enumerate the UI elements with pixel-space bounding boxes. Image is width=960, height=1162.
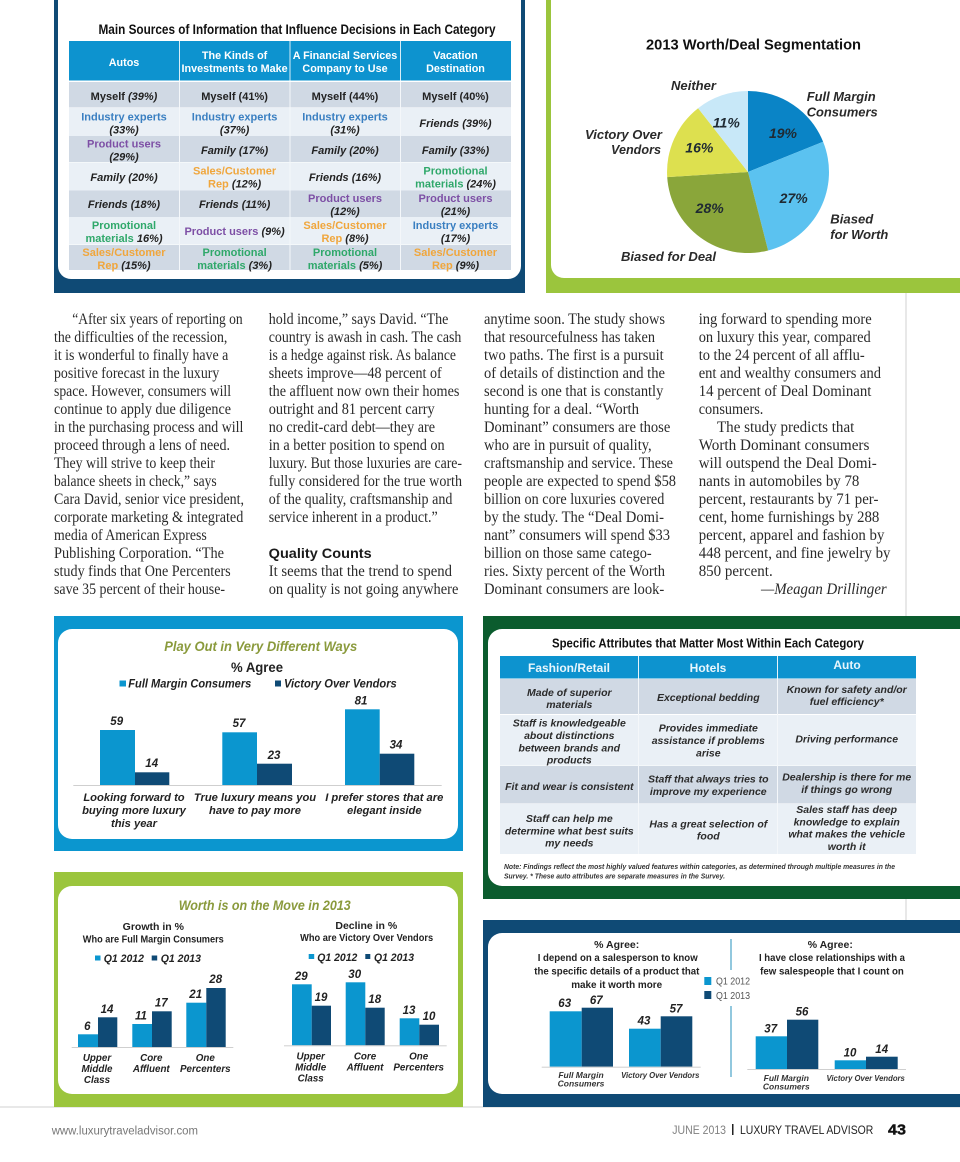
article text column 1: continue to apply due diligence <box>54 401 231 418</box>
article text column 3: nant” consumers will spend $33 <box>484 527 670 544</box>
chart: depend on a salesperson: 57 <box>670 1004 683 1016</box>
legend <box>120 678 397 690</box>
article text column 3: ries. Sixty percent of the Worth <box>484 563 665 580</box>
article text column 4: nants in automobiles by 78 <box>699 473 860 490</box>
article text column 4 <box>699 311 891 598</box>
table body rows: (17%) <box>441 233 471 245</box>
table body rows: Product users (9%) <box>184 226 285 238</box>
table rows <box>500 679 916 854</box>
chart: close relationships with salespeople: % Agree: <box>808 939 853 951</box>
footer: date, magazine name and page number: 43 <box>888 1122 906 1138</box>
table rows: materials <box>546 699 593 711</box>
table body rows: Product users <box>87 138 161 150</box>
article text column 3: craftsmanship and service. These <box>484 455 673 472</box>
article text column 2: outright and 81 percent carry <box>269 401 435 418</box>
article text column 2: country is awash in cash. The cash <box>269 329 462 346</box>
table body rows: Industry experts <box>192 112 277 124</box>
table body rows: Promotional <box>203 247 267 259</box>
chart: depend on a salesperson: Victory Over Vendors <box>621 1070 700 1080</box>
table body rows: (31%) <box>330 124 360 136</box>
table body rows: Family (17%) <box>201 145 269 157</box>
chart: depend on a salesperson: make it worth more <box>571 979 662 991</box>
table rows: knowledge to explain <box>794 816 900 828</box>
legend: Full Margin Consumers <box>128 678 251 690</box>
chart: decline in victory over vendors: Who are Victory Over Vendors <box>300 932 433 944</box>
table body rows: Rep (15%) <box>97 260 151 272</box>
table header: Auto <box>833 658 861 672</box>
chart: growth in full margin consumers <box>72 921 233 1086</box>
article text column 2: no credit-card debt—they are <box>269 419 435 436</box>
chart: growth in full margin consumers: 17 <box>155 998 168 1010</box>
table body rows: Family (33%) <box>422 145 489 157</box>
chart: decline in victory over vendors: Core <box>354 1052 377 1063</box>
table body rows <box>69 82 511 272</box>
article text column 4: cent, home furnishings by 288 <box>699 509 880 526</box>
chart: depend on a salesperson: Full Margin <box>558 1070 604 1080</box>
table body rows: Industry experts <box>413 220 498 232</box>
table rows: Has a great selection of <box>649 818 769 830</box>
table rows: Staff is knowledgeable <box>513 718 626 730</box>
article text column 1: the difficulties of the recession, <box>54 329 227 346</box>
table body rows: Industry experts <box>302 112 388 124</box>
pie labels: Full Margin <box>807 89 876 104</box>
chart: decline in victory over vendors: Decline in % <box>335 920 398 932</box>
heading: segmentation: 2013 Worth/Deal Segmentation <box>646 38 861 54</box>
table body rows: Myself (39%) <box>91 91 158 103</box>
article text column 1 <box>54 311 244 598</box>
pie labels: Victory Over <box>585 127 663 142</box>
table header <box>500 656 916 678</box>
table rows: about distinctions <box>524 730 615 742</box>
legend: Q1 2012 <box>716 976 750 988</box>
table footnote: Survey. * These auto attributes are separate measures in the Survey. <box>504 872 725 880</box>
pie labels: Consumers <box>807 104 878 120</box>
pie chart: 11% <box>713 114 740 130</box>
table header row: Destination <box>426 63 485 75</box>
article text column 2: sheets improve—48 percent of <box>269 365 442 382</box>
article text column 3: hunting for a deal. “Worth <box>484 401 639 418</box>
panel: worth is on the move bar charts <box>54 872 463 1107</box>
divider between charts <box>730 939 732 1077</box>
chart: decline in victory over vendors: Percenters <box>393 1063 445 1074</box>
table footnote <box>504 862 895 880</box>
chart: decline in victory over vendors: 19 <box>315 992 328 1004</box>
table rows: Exceptional bedding <box>657 692 760 704</box>
chart: decline in victory over vendors: Middle <box>295 1063 327 1074</box>
table body rows: Rep (8%) <box>321 233 369 245</box>
article text column 3: by the study. The “Deal Domi- <box>484 509 664 526</box>
article text column 3: who are in pursuit of quality, <box>484 437 652 454</box>
article text column 4: 14 percent of Deal Dominant <box>699 383 872 400</box>
table rows: Driving performance <box>795 734 898 746</box>
table rows: Staff that always tries to <box>648 774 769 786</box>
table body rows: Family (20%) <box>90 172 158 184</box>
article text column 3: Dominant consumers are look- <box>484 581 664 598</box>
article text column 1: “After six years of reporting on <box>72 311 243 328</box>
table body rows: Myself (40%) <box>422 91 489 103</box>
chart: depend on a salesperson: 43 <box>637 1016 651 1028</box>
category labels: buying more luxury <box>82 805 187 817</box>
article text column 1: in the purchasing process and will <box>54 419 243 436</box>
chart: growth in full margin consumers: 21 <box>188 989 202 1001</box>
table header row: The Kinds of <box>202 50 268 62</box>
table body rows: Industry experts <box>81 112 167 124</box>
table body rows: (12%) <box>330 206 360 218</box>
panel: main sources of information table <box>54 0 525 293</box>
article text column 4: Worth Dominant consumers <box>699 437 869 454</box>
table body rows: Friends (18%) <box>88 199 160 211</box>
byline: —Meagan Drillinger <box>760 581 888 598</box>
chart: close relationships with salespeople: Full Margin <box>764 1073 809 1083</box>
legend <box>704 976 750 1002</box>
article text column 1: it is wonderful to finally have a <box>54 347 228 364</box>
chart: decline in victory over vendors: 30 <box>348 969 362 981</box>
chart: growth in full margin consumers: Who are Full Margin Consumers <box>83 934 224 946</box>
article text column 3: billion on core luxuries covered <box>484 491 665 508</box>
chart: decline in victory over vendors: 18 <box>368 994 382 1006</box>
chart: depend on a salesperson: Consumers <box>558 1078 605 1088</box>
chart: close relationships with salespeople: 14 <box>875 1044 889 1056</box>
table rows: what makes the vehicle <box>788 829 905 841</box>
panel: 2013 worth/deal segmentation pie <box>546 0 960 293</box>
article text column 2: on quality is not going anywhere <box>269 581 459 598</box>
chart: decline in victory over vendors <box>284 920 447 1085</box>
table header row: Autos <box>109 57 139 69</box>
chart: decline in victory over vendors: Affluent <box>346 1063 384 1074</box>
article text column 3: that resourcefulness has taken <box>484 329 655 346</box>
table rows: Fit and wear is consistent <box>505 781 634 793</box>
article text column 2: luxury. But those luxuries are care- <box>269 455 462 472</box>
pie labels: Vendors <box>611 142 661 157</box>
article text column 3: of details of distinction and the <box>484 365 665 382</box>
table body rows: Sales/Customer <box>82 247 166 259</box>
chart: growth in full margin consumers: Percenters <box>180 1064 231 1075</box>
chart: depend on a salesperson: % Agree: <box>594 939 639 951</box>
chart: decline in victory over vendors: Class <box>298 1074 324 1085</box>
chart: growth in full margin consumers: 11 <box>135 1010 147 1022</box>
pie chart <box>667 91 829 253</box>
chart: depend on a salesperson <box>534 939 701 1088</box>
article text column 1: media of American Express <box>54 527 207 544</box>
category labels: True luxury means you <box>194 792 316 804</box>
table rows: assistance if problems <box>652 735 765 747</box>
category labels: this year <box>111 818 158 830</box>
table body rows: Friends (11%) <box>199 199 271 211</box>
bars: 14 <box>145 758 159 770</box>
table body rows: (37%) <box>220 124 250 136</box>
table body rows: Friends (39%) <box>419 118 492 130</box>
article text column 4: on luxury this year, compared <box>699 329 871 346</box>
chart: growth in full margin consumers: 28 <box>208 974 223 986</box>
article text column 3: Dominant” consumers are those <box>484 419 670 436</box>
panel: specific attributes table <box>483 616 960 899</box>
table header: Hotels <box>690 661 727 675</box>
chart: close relationships with salespeople: 10 <box>844 1048 857 1060</box>
table rows: my needs <box>545 838 594 850</box>
panel: play out in very different ways bar chart <box>54 616 463 851</box>
table header row: A Financial Services <box>293 50 397 62</box>
article text column 4: percent, apparel and fashion by <box>699 527 885 544</box>
chart: depend on a salesperson: the specific details of a product that <box>534 966 700 978</box>
table body rows: (21%) <box>441 206 471 218</box>
chart: growth in full margin consumers: 14 <box>101 1004 114 1016</box>
chart: decline in victory over vendors: Upper <box>297 1052 326 1063</box>
table body rows: Myself (44%) <box>312 91 379 103</box>
pie labels: Biased for Deal <box>621 249 716 264</box>
legend: Q1 2013 <box>716 991 750 1002</box>
article text column 1: save 35 percent of their house- <box>54 581 225 598</box>
chart: decline in victory over vendors: Q1 2013 <box>374 952 414 964</box>
table rows: fuel efficiency* <box>810 696 885 708</box>
chart: close relationships with salespeople: Victory Over Vendors <box>827 1073 905 1083</box>
subheading: % agree: % Agree <box>231 659 283 675</box>
article text column 2 <box>269 311 462 598</box>
article text column 1: space. However, consumers will <box>54 383 231 400</box>
chart: close relationships with salespeople: I have close relationships with a <box>759 952 905 964</box>
table body rows: Rep (12%) <box>208 178 262 190</box>
chart: decline in victory over vendors: Q1 2012 <box>317 952 357 964</box>
chart: growth in full margin consumers: Growth in % <box>123 921 185 933</box>
table body rows: Sales/Customer <box>414 247 498 259</box>
pie chart: 19% <box>769 125 798 141</box>
table body rows: Promotional <box>92 220 156 232</box>
bars: 23 <box>267 750 281 762</box>
heading: main sources: Main Sources of Information that Influence Decisions in Each Category <box>98 22 496 37</box>
chart: growth in full margin consumers: One <box>196 1053 215 1064</box>
article text column 3: two paths. The first is a pursuit <box>484 347 664 364</box>
pie labels: Biased <box>830 212 874 226</box>
chart: close relationships with salespeople: few salespeople that I count on <box>760 966 904 978</box>
category labels: I prefer stores that are <box>325 792 443 804</box>
table rows: worth it <box>828 841 866 853</box>
article text column 2: the affluent now own their homes <box>269 383 459 400</box>
chart: growth in full margin consumers: Middle <box>81 1064 113 1075</box>
table body rows: (29%) <box>109 152 139 164</box>
article text column 4: will outspend the Deal Domi- <box>699 455 877 472</box>
table rows: products <box>546 755 592 767</box>
pie chart: 28% <box>695 200 724 216</box>
table rows: Provides immediate <box>659 723 758 735</box>
table body rows: Myself (41%) <box>201 91 268 103</box>
article text column 1: positive forecast in the luxury <box>54 365 220 382</box>
article text column 4: ing forward to spending more <box>699 311 872 328</box>
bars: 34 <box>390 740 403 752</box>
table header row <box>69 41 511 80</box>
table rows: improve my experience <box>650 786 767 798</box>
bars <box>73 696 442 786</box>
pie labels <box>585 78 888 264</box>
article text column 4: ent and wealthy consumers and <box>699 365 881 382</box>
table body rows: Promotional <box>313 247 377 259</box>
article text column 4: The study predicts that <box>717 419 855 436</box>
article text column 4: consumers. <box>699 401 763 418</box>
table rows: Made of superior <box>527 687 613 699</box>
pie labels: Neither <box>671 78 717 93</box>
footer: date, magazine name and page number: JUNE 2013 <box>672 1125 726 1137</box>
article text column 2: is a hedge against risk. As balance <box>269 347 456 364</box>
chart: decline in victory over vendors: 13 <box>403 1005 416 1017</box>
article text column 4: to the 24 percent of all afflu- <box>699 347 865 364</box>
bars: 59 <box>110 716 124 728</box>
table body rows: Rep (9%) <box>432 260 479 272</box>
pie chart: 16% <box>685 140 714 156</box>
chart: depend on a salesperson: I depend on a salesperson to know <box>538 952 698 964</box>
panel: salesperson agreement bar charts <box>483 920 960 1107</box>
chart: growth in full margin consumers: Core <box>140 1053 163 1064</box>
table rows: arise <box>696 747 721 759</box>
heading: specific attributes: Specific Attributes that Matter Most Within Each Category <box>552 636 864 650</box>
table body rows: Family (20%) <box>311 145 379 157</box>
category labels: elegant inside <box>347 805 422 817</box>
article text column 2: of the quality, craftsmanship and <box>269 491 453 508</box>
chart: decline in victory over vendors: One <box>409 1052 429 1063</box>
table body rows: materials (3%) <box>197 260 272 272</box>
article text column 3: second is one that is constantly <box>484 383 664 400</box>
chart: depend on a salesperson: 67 <box>590 995 603 1007</box>
table body rows: Promotional <box>423 166 488 178</box>
table header row: Vacation <box>433 50 478 62</box>
subheading: quality counts: Quality Counts <box>269 545 372 561</box>
footer: date, magazine name and page number: LUXURY TRAVEL ADVISOR <box>740 1125 873 1137</box>
table header: Fashion/Retail <box>528 661 610 675</box>
bars: 81 <box>355 696 367 708</box>
category labels <box>82 792 443 830</box>
article text column 2: in a better position to spend on <box>269 437 445 454</box>
article text column 1: Cara David, senior vice president, <box>54 491 244 508</box>
table rows: Dealership is there for me <box>782 772 911 784</box>
heading: worth is on the move: Worth is on the Move in 2013 <box>179 898 351 913</box>
chart: growth in full margin consumers: Upper <box>83 1053 112 1064</box>
table body rows: materials 16%) <box>85 233 163 245</box>
article text column 4: 448 percent, and fine jewelry by <box>699 545 891 562</box>
table rows: Known for safety and/or <box>787 684 908 696</box>
table body rows: Sales/Customer <box>193 166 277 178</box>
table header row: Investments to Make <box>181 63 288 75</box>
table body rows: Sales/Customer <box>303 220 387 232</box>
table rows: if things go wrong <box>801 784 893 796</box>
table body rows: Product users <box>419 193 492 205</box>
table rows: determine what best suits <box>505 825 634 837</box>
pie labels: for Worth <box>830 227 888 242</box>
table footnote: Note: Findings reflect the most highly valued features within categories, as determined through multiple measures in the <box>504 862 895 871</box>
chart: depend on a salesperson: 63 <box>558 998 572 1010</box>
article text column 1: Publishing Corporation. “The <box>54 545 224 562</box>
table body rows: Friends (16%) <box>309 172 381 184</box>
chart: growth in full margin consumers: Class <box>84 1075 111 1086</box>
table body rows: Product users <box>308 193 382 205</box>
chart: growth in full margin consumers: Q1 2012 <box>104 953 144 965</box>
table header row: Company to Use <box>302 63 388 75</box>
table rows: Sales staff has deep <box>796 804 898 816</box>
legend: Victory Over Vendors <box>284 678 397 690</box>
footer: date, magazine name and page number <box>672 1122 906 1138</box>
chart: close relationships with salespeople: Consumers <box>763 1082 810 1092</box>
article text column 4: percent, restaurants by 71 per- <box>699 491 878 508</box>
article text column 3: anytime soon. The study shows <box>484 311 665 328</box>
chart: decline in victory over vendors: 10 <box>423 1011 436 1023</box>
table body rows: materials (24%) <box>415 178 496 190</box>
chart: growth in full margin consumers: 6 <box>84 1021 91 1033</box>
article text column 1: study finds that One Percenters <box>54 563 231 580</box>
bars: 57 <box>233 718 246 730</box>
article text column 4: 850 percent. <box>699 563 773 580</box>
chart: growth in full margin consumers: Q1 2013 <box>161 953 201 965</box>
table rows: between brands and <box>519 742 621 754</box>
article text column 3: people are expected to spend $58 <box>484 473 676 490</box>
article text column 2: It seems that the trend to spend <box>269 563 452 580</box>
article text column 1: balance sheets in check,” says <box>54 473 217 490</box>
table body rows: (33%) <box>109 124 139 136</box>
category labels: Looking forward to <box>83 792 185 804</box>
chart: close relationships with salespeople <box>747 939 906 1092</box>
article text column 2: fully considered for the true worth <box>269 473 462 490</box>
chart: decline in victory over vendors: 29 <box>294 971 308 983</box>
article text column 1: proceed through a lens of need. <box>54 437 230 454</box>
footer: website url: www.luxurytraveladvisor.com <box>51 1126 198 1138</box>
pie chart: 27% <box>779 190 808 206</box>
article text column 2: service inherent in a product.” <box>269 509 438 526</box>
chart: close relationships with salespeople: 37 <box>764 1024 778 1036</box>
table rows: food <box>697 831 720 843</box>
table rows: Staff can help me <box>526 813 613 825</box>
chart: growth in full margin consumers: Affluent <box>132 1064 170 1075</box>
article text column 1: corporate marketing & integrated <box>54 509 244 526</box>
article text column 3 <box>484 311 676 598</box>
heading: play out: Play Out in Very Different Ways <box>164 639 358 654</box>
chart: close relationships with salespeople: 56 <box>796 1006 809 1018</box>
table body rows: materials (5%) <box>308 260 383 272</box>
article text column 1: They will strive to keep their <box>54 455 216 472</box>
category labels: have to pay more <box>209 805 301 817</box>
article text column 3: billion on those same catego- <box>484 545 652 562</box>
article text column 2: hold income,” says David. “The <box>269 311 449 328</box>
